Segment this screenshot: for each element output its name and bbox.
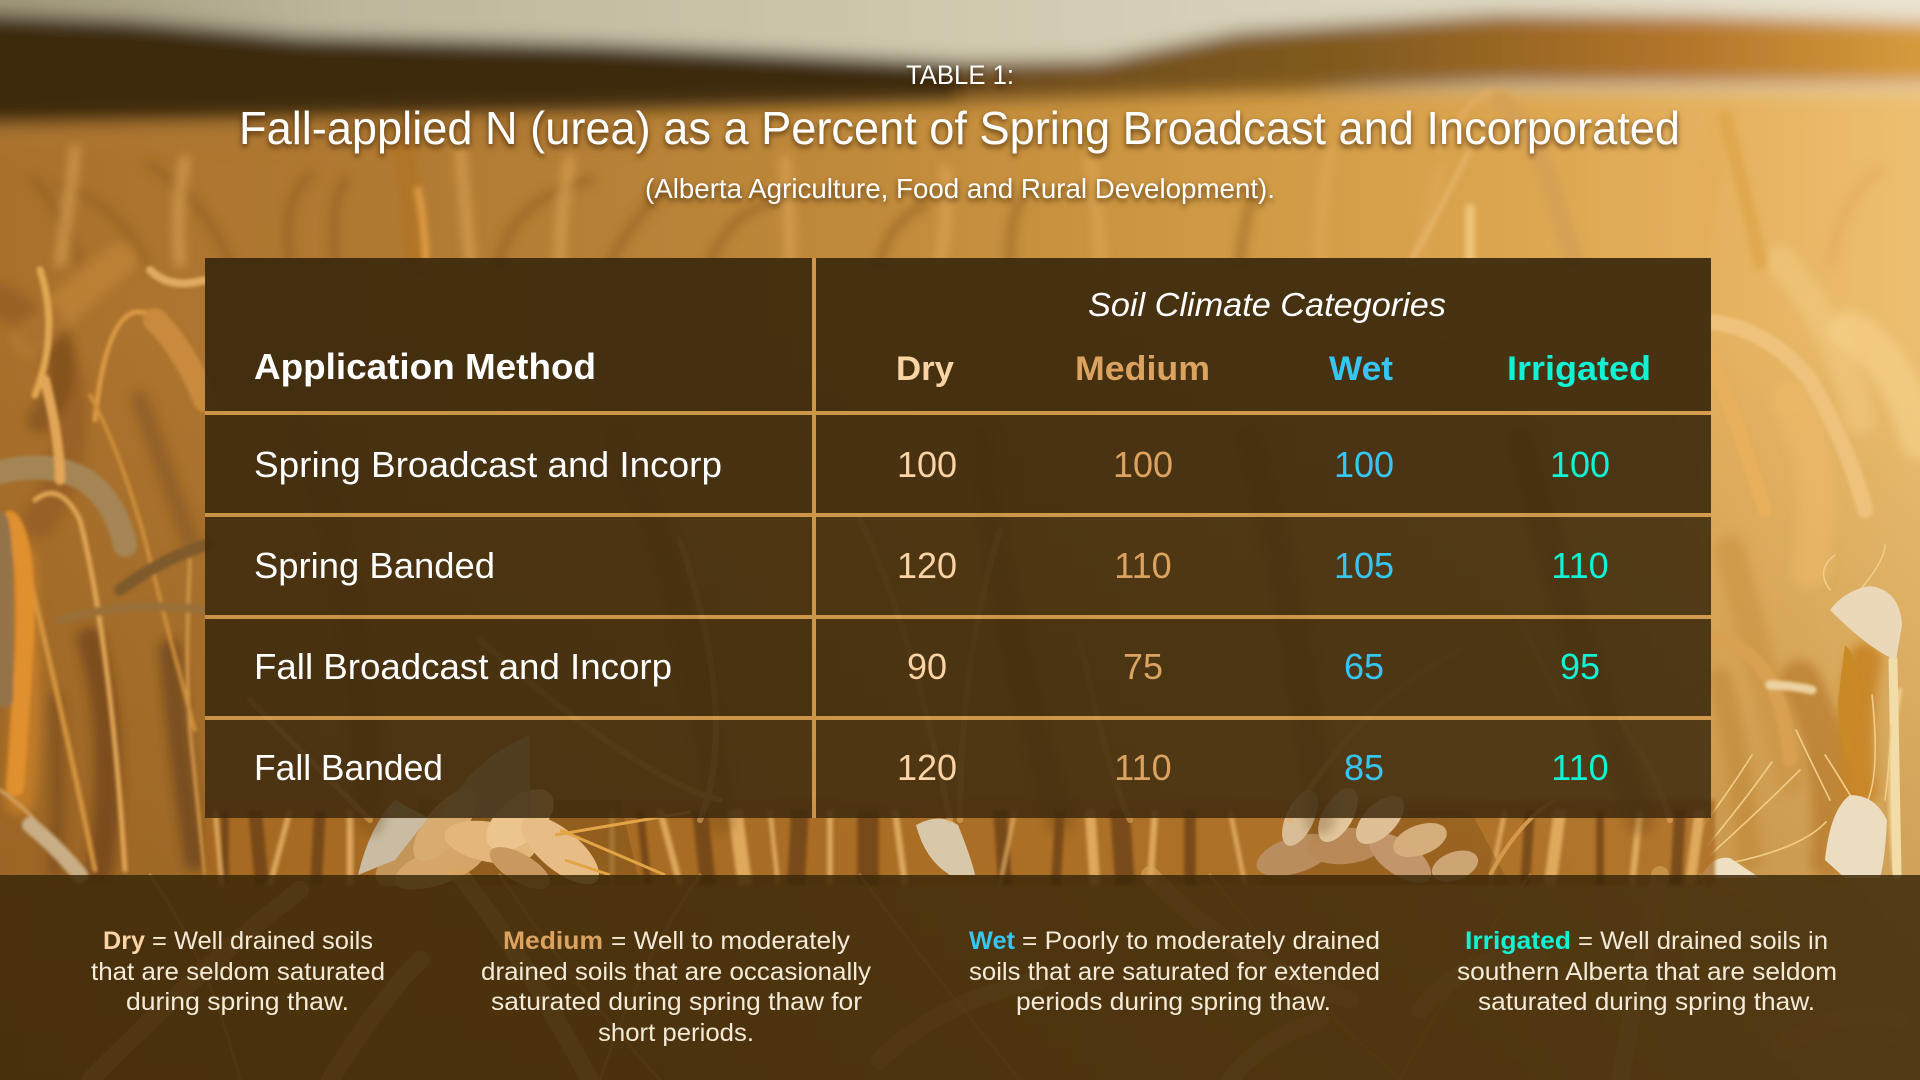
legend: wet: = Poorly to moderately drained	[1022, 927, 1380, 955]
legend: wet: periods during spring thaw.	[1016, 988, 1331, 1016]
row: spring broadcast and incorp: 100	[1334, 444, 1394, 485]
row: spring banded: 110	[1114, 545, 1172, 586]
column headings: soil categories	[896, 350, 1651, 388]
sky and distant tree line	[0, 0, 1920, 142]
row: spring banded: Spring Banded	[254, 545, 495, 586]
legend: dry: = Well drained soils	[152, 927, 373, 955]
legend: medium	[481, 927, 872, 1047]
row: spring broadcast and incorp: 100	[897, 444, 957, 485]
row: fall banded	[254, 747, 1609, 788]
legend: dry: during spring thaw.	[126, 988, 349, 1016]
legend: irrigated: Irrigated	[1465, 927, 1571, 955]
column headings: soil categories: Wet	[1329, 350, 1393, 388]
table grid lines	[205, 258, 1711, 818]
legend: wet: Wet	[969, 927, 1016, 955]
row: fall broadcast and incorp: 90	[907, 646, 947, 687]
heading: main title: Fall-applied N (urea) as a Percent of Spring Broadcast and Incorporated	[239, 102, 1680, 154]
column headings: soil categories: Irrigated	[1507, 350, 1651, 388]
pale ear below table, middle	[916, 818, 975, 875]
column heading: application method: Application Method	[254, 346, 596, 387]
column group heading: Soil Climate Categories	[1088, 286, 1446, 323]
foreground ears at the top	[404, 92, 1760, 262]
legend: medium: Medium	[503, 927, 603, 955]
row: fall broadcast and incorp: 95	[1560, 646, 1600, 687]
golden ear, lower right	[1838, 645, 1860, 760]
wheat ear below table, left	[358, 777, 690, 899]
row: fall broadcast and incorp: Fall Broadcast and Incorp	[254, 646, 672, 687]
heading: table number: TABLE 1:	[906, 60, 1014, 90]
table cell backgrounds	[205, 258, 1711, 818]
legend: medium: saturated during spring thaw for	[491, 988, 862, 1016]
legend: irrigated: southern Alberta that are seldom	[1457, 958, 1837, 986]
legend: medium: short periods.	[598, 1019, 754, 1047]
row: fall banded: 110	[1551, 747, 1609, 788]
legend: irrigated	[1457, 927, 1837, 1016]
row: spring broadcast and incorp: 100	[1550, 444, 1610, 485]
legend: wet: soils that are saturated for extended	[969, 958, 1380, 986]
column headings: soil categories: Medium	[1075, 350, 1210, 388]
row: spring broadcast and incorp	[254, 444, 1610, 485]
pale ear, right side	[1830, 586, 1902, 660]
row: spring broadcast and incorp: Spring Broadcast and Incorp	[254, 444, 722, 485]
row: fall banded: 85	[1344, 747, 1384, 788]
distant crop blurred stems	[0, 150, 1920, 870]
wheat ear below table, right	[1251, 782, 1555, 893]
row: spring banded: 120	[897, 545, 957, 586]
legend: medium: drained soils that are occasionally	[481, 958, 872, 986]
legend: dry: Dry	[103, 927, 145, 955]
row: fall broadcast and incorp	[254, 646, 1600, 687]
stems and ears, right side	[1700, 322, 1900, 875]
stalks in the strip below the table	[205, 800, 1715, 885]
row: fall broadcast and incorp: 65	[1344, 646, 1384, 687]
row: spring banded: 105	[1334, 545, 1394, 586]
legend: dry	[91, 927, 385, 1016]
panel: data table	[205, 258, 1711, 818]
footer band	[0, 875, 1920, 1080]
panel: footer legend	[0, 875, 1920, 1080]
legend: dry: that are seldom saturated	[91, 958, 385, 986]
legend: irrigated: saturated during spring thaw.	[1478, 988, 1815, 1016]
row: spring banded	[254, 545, 1609, 586]
row: spring broadcast and incorp: 100	[1113, 444, 1173, 485]
row: fall broadcast and incorp: 75	[1123, 646, 1163, 687]
row: fall banded: 110	[1114, 747, 1172, 788]
column headings: soil categories: Dry	[896, 350, 954, 388]
row: fall banded: Fall Banded	[254, 747, 443, 788]
row: spring banded: 110	[1551, 545, 1609, 586]
heading: source line: (Alberta Agriculture, Food and Rural Development).	[645, 173, 1275, 204]
legend: wet	[969, 927, 1380, 1016]
pale ear, lower right	[1825, 795, 1887, 878]
legend: irrigated: = Well drained soils in	[1578, 927, 1828, 955]
texture seen through table and footer	[90, 430, 1900, 1080]
stems and drooping ears, left side	[0, 270, 205, 875]
legend: medium: = Well to moderately	[611, 927, 851, 955]
row: fall banded: 120	[897, 747, 957, 788]
